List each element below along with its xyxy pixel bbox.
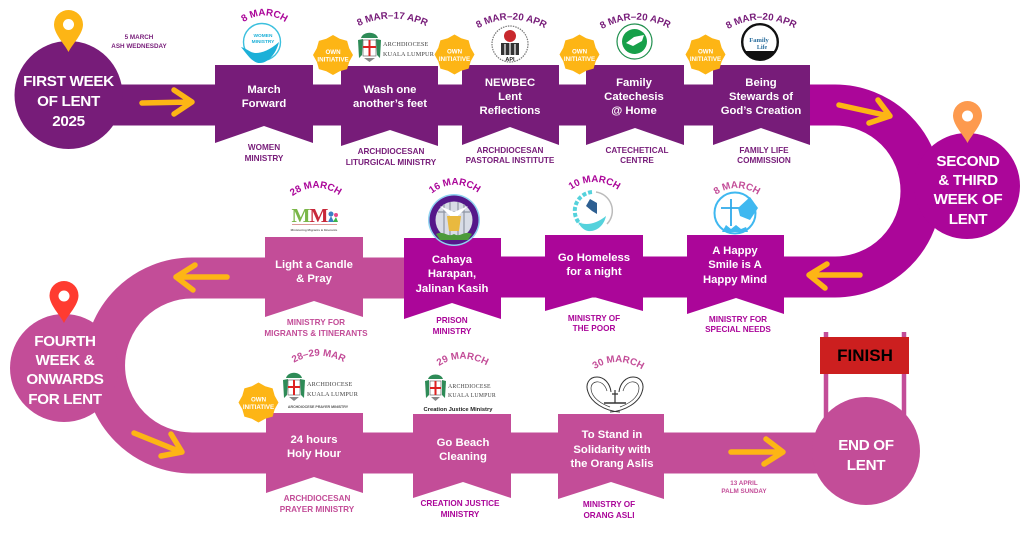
ministry (346, 147, 437, 167)
ministry: ORANG ASLI (583, 511, 635, 520)
activity title: Happy Mind (703, 274, 767, 286)
activity title: To Stand in (582, 429, 642, 441)
heading: fourth week (26, 333, 104, 408)
step: Being Stewards of God's Creation (713, 12, 810, 165)
activity title: Forward (242, 98, 286, 110)
step: Light a Candle & Pray (264, 181, 368, 338)
road: first week band (68, 84, 812, 126)
step: A Happy Smile is A Happy Mind (687, 181, 784, 334)
date: 8 MARCH (714, 181, 760, 194)
ministry: CREATION JUSTICE (420, 499, 500, 508)
ministry: MINISTRY (433, 327, 472, 336)
banner (404, 238, 501, 319)
activity title (480, 77, 540, 117)
badge: own initiative 5: INITIATIVE (243, 404, 274, 411)
ministry: PRAYER MINISTRY (280, 505, 355, 514)
date: 10 MARCH (568, 175, 621, 190)
activity title: Reflections (480, 105, 540, 117)
date: 28 MARCH (290, 181, 342, 196)
activity title: Harapan, (428, 268, 476, 280)
ministry: THE POOR (573, 324, 615, 333)
icon: special needs logo (714, 192, 758, 234)
ministry: FAMILY LIFE (739, 146, 789, 155)
road: fourth week curve (105, 278, 866, 453)
text: archdiocese wordmark (448, 384, 496, 399)
ministry: PRISON (436, 316, 468, 325)
heading: first week (23, 73, 114, 130)
ministry (737, 146, 791, 165)
arrow: right curve bottom (809, 264, 860, 288)
icon: migrants ministry logo: M (292, 205, 311, 227)
icon: prison ministry logo (428, 194, 480, 246)
activity title: Smile is A (708, 259, 762, 271)
heading: first week: OF LENT (37, 93, 101, 110)
activity title: 24 hours (290, 434, 338, 446)
activity title: Jalinan Kasih (416, 283, 489, 295)
step: To Stand in Solidarity with the Orang Aslis (558, 355, 664, 520)
activity title: Light a Candle (275, 259, 353, 271)
ministry (433, 316, 472, 336)
icon: family life logo: Life (757, 45, 767, 51)
ministry: ARCHDIOCESAN (477, 146, 544, 155)
ministry: LITURGICAL MINISTRY (346, 158, 437, 167)
banner (687, 235, 784, 314)
icon: pastoral institute logo: API (505, 57, 515, 63)
banner (558, 414, 664, 499)
note: ash wednesday: ASH WEDNESDAY (111, 43, 167, 50)
ministry (264, 318, 368, 338)
pin: red (50, 281, 78, 323)
note: palm sunday (721, 480, 767, 495)
ministry: MINISTRY FOR (287, 318, 345, 327)
arrow: left curve bottom (134, 433, 182, 456)
ministry: SPECIAL NEEDS (705, 325, 771, 334)
activity title: Cahaya (432, 254, 473, 266)
activity title (437, 437, 489, 463)
ministry: MINISTRY (245, 154, 284, 163)
finish sign (820, 332, 909, 425)
ministry: ARCHDIOCESAN (284, 494, 351, 503)
activity title (242, 84, 286, 110)
activity title (287, 434, 342, 460)
text: archdiocese wordmark: KUALA LUMPUR (448, 393, 496, 399)
arrow: right curve top (839, 100, 890, 123)
heading: second and third week (934, 153, 1002, 228)
activity title: Family (616, 77, 653, 89)
badge: own initiative 5 (238, 382, 278, 422)
ministry (466, 146, 555, 165)
activity title: Solidarity with (573, 444, 651, 456)
activity title (558, 252, 630, 278)
step: NEWBEC Lent Reflections (462, 12, 559, 165)
heading: second and third week: SECOND (936, 153, 1000, 170)
activity title: & Pray (296, 273, 333, 285)
text: archdiocese wordmark: ARCHDIOCESE (448, 384, 491, 390)
activity title: @ Home (611, 105, 657, 117)
icon: archdiocese crest (358, 33, 381, 62)
banner (413, 414, 511, 498)
icon: archdiocese crest (425, 374, 446, 401)
ministry: ARCHDIOCESAN (358, 147, 425, 156)
end node: end of Lent (812, 397, 920, 505)
icon: family life logo: Family (749, 37, 769, 44)
activity title: for a night (566, 266, 622, 278)
badge: own initiative 3 (560, 34, 600, 74)
badge: own initiative 4: INITIATIVE (690, 56, 721, 63)
start node: first week of Lent (14, 10, 122, 149)
heading: fourth week: ONWARDS (26, 371, 104, 388)
note: palm sunday: 13 APRIL (730, 480, 758, 487)
activity title: NEWBEC (485, 77, 535, 89)
badge: own initiative 1: OWN (325, 49, 341, 56)
ministry: PASTORAL INSTITUTE (466, 156, 555, 165)
activity title (353, 84, 427, 110)
activity title: Stewards of (729, 91, 793, 103)
badge: own initiative 4 (686, 34, 726, 74)
step: 24 hours Holy Hour (266, 348, 363, 514)
ministry: MINISTRY OF (583, 500, 635, 509)
ministry: MINISTRY FOR (709, 315, 767, 324)
step: Go Homeless for a night (545, 175, 643, 333)
date: 8 MAR–17 APR (356, 12, 428, 26)
activity title: Being (745, 77, 777, 89)
banner (341, 66, 438, 146)
text: archdiocese wordmark: ARCHDIOCESE (307, 381, 353, 388)
step: Family Catechesis @ Home (586, 12, 684, 165)
text: prayer ministry caption: ARCHDIOCESE PRAYER MINISTRY (288, 405, 349, 409)
sign posts (826, 332, 904, 425)
icon: women ministry logo: WOMEN (254, 33, 273, 39)
ministry: MINISTRY (441, 510, 480, 519)
heading: fourth week: FOR LENT (28, 391, 103, 408)
arrow: final band (731, 439, 783, 464)
text: archdiocese wordmark: ARCHDIOCESE (383, 41, 429, 48)
icon: archdiocese crest (283, 373, 305, 401)
activity title (604, 77, 664, 117)
activity title: Catechesis (604, 91, 664, 103)
badge: own initiative 3: INITIATIVE (564, 56, 595, 63)
heading: end of Lent: LENT (847, 457, 886, 474)
heading: first week: 2025 (52, 113, 86, 130)
activity title (721, 77, 801, 117)
date: 28–29 MAR (292, 348, 346, 363)
text: archdiocese wordmark: KUALA LUMPUR (307, 391, 359, 398)
date: 29 MARCH (436, 352, 489, 366)
activity title: another’s feet (353, 98, 427, 110)
banner (545, 235, 643, 311)
ministry (245, 143, 284, 163)
badge: own initiative 2: INITIATIVE (439, 56, 470, 63)
icon: women ministry logo (241, 24, 280, 63)
banner (215, 65, 313, 143)
ministry (583, 500, 635, 520)
activity title (416, 254, 489, 295)
date: 8 MAR–20 APR (476, 12, 547, 28)
step: March Forward (215, 8, 313, 163)
date: 30 MARCH (592, 355, 644, 370)
activity title: Cleaning (439, 451, 487, 463)
icon: pastoral institute logo (492, 26, 528, 63)
banner (713, 65, 810, 145)
step: Cahaya Harapan, Jalinan Kasih (404, 178, 501, 336)
ministry (568, 314, 620, 333)
heading: first week: FIRST WEEK (23, 73, 114, 90)
activity title: Go Beach (437, 437, 489, 449)
text: archdiocese wordmark (383, 41, 435, 58)
ministry (605, 146, 669, 165)
text: archdiocese wordmark: KUALA LUMPUR (383, 51, 435, 58)
icon: family life logo (742, 24, 778, 60)
arrow: first band (142, 90, 192, 114)
pin: orange (953, 101, 982, 143)
activity title: A Happy (712, 245, 758, 257)
icon: women ministry logo: MINISTRY (252, 39, 275, 45)
pin: yellow (54, 10, 83, 52)
ministry (280, 494, 355, 514)
activity title: Wash one (364, 84, 416, 96)
text: archdiocese wordmark (307, 381, 359, 398)
activity title: the Orang Aslis (570, 458, 654, 470)
ministry: MIGRANTS & ITINERANTS (264, 329, 368, 338)
badge: own initiative 1: INITIATIVE (317, 56, 349, 64)
icon: migrants ministry logo: Ministering Migrants & Itinerants (291, 228, 338, 232)
text: creation justice caption: Creation Justice Ministry (424, 407, 493, 413)
icon: migrants ministry logo (291, 205, 338, 232)
date: 16 MARCH (429, 178, 481, 194)
road: second and third week curve (404, 105, 921, 277)
heading: fourth week: FOURTH (34, 333, 96, 350)
ministry: MINISTRY OF (568, 314, 620, 323)
icon: catechetical centre logo (617, 24, 652, 59)
note: ash wednesday: 5 MARCH (125, 34, 154, 41)
badge: own initiative 1 (313, 35, 353, 75)
activity title: Lent (498, 91, 522, 103)
badge: own initiative 5: OWN (251, 396, 267, 404)
ministry: WOMEN (248, 143, 280, 152)
activity title (570, 429, 654, 470)
icon: ministry of the poor logo (575, 192, 612, 231)
heading: fourth week: WEEK & (36, 352, 95, 369)
badge: own initiative 4: OWN (698, 48, 714, 56)
ministry (420, 499, 500, 519)
step: Wash one another's feet (341, 12, 438, 167)
ministry: COMMISSION (737, 156, 791, 165)
activity title (275, 259, 353, 285)
banner (265, 237, 363, 317)
heading: second and third week: & THIRD (938, 172, 998, 189)
note: palm sunday: PALM SUNDAY (721, 488, 767, 495)
banner (586, 65, 684, 145)
activity title: God’s Creation (721, 105, 801, 117)
activity title: Holy Hour (287, 448, 342, 460)
activity title: March (247, 84, 281, 96)
node: second and third week (914, 101, 1020, 239)
arrow: left curve top (176, 265, 227, 290)
ministry: CATECHETICAL (605, 146, 669, 155)
sign board (820, 337, 909, 374)
sign text: FINISH (837, 346, 893, 365)
icon: orang asli hearts logo (587, 377, 643, 412)
ministry (705, 315, 771, 334)
activity title (703, 245, 767, 286)
banner (266, 413, 363, 493)
heading: end of Lent: END OF (838, 437, 894, 454)
badge: own initiative 2 (434, 34, 474, 74)
banner (462, 65, 559, 145)
heading: second and third week: WEEK OF (934, 191, 1002, 208)
badge: own initiative 2: OWN (447, 48, 463, 56)
heading: second and third week: LENT (949, 211, 988, 228)
heading: end of Lent (838, 437, 894, 474)
date: 8 MAR–20 APR (726, 12, 796, 28)
date: 8 MARCH (241, 8, 288, 22)
date: 8 MAR–20 APR (600, 12, 670, 28)
icon: migrants ministry logo: M (310, 205, 329, 227)
note: ash wednesday (111, 34, 167, 50)
ministry: CENTRE (620, 156, 654, 165)
badge: own initiative 3: OWN (572, 48, 588, 56)
activity title: Go Homeless (558, 252, 630, 264)
node: fourth week (10, 281, 118, 422)
step: Go Beach Cleaning (413, 352, 511, 519)
